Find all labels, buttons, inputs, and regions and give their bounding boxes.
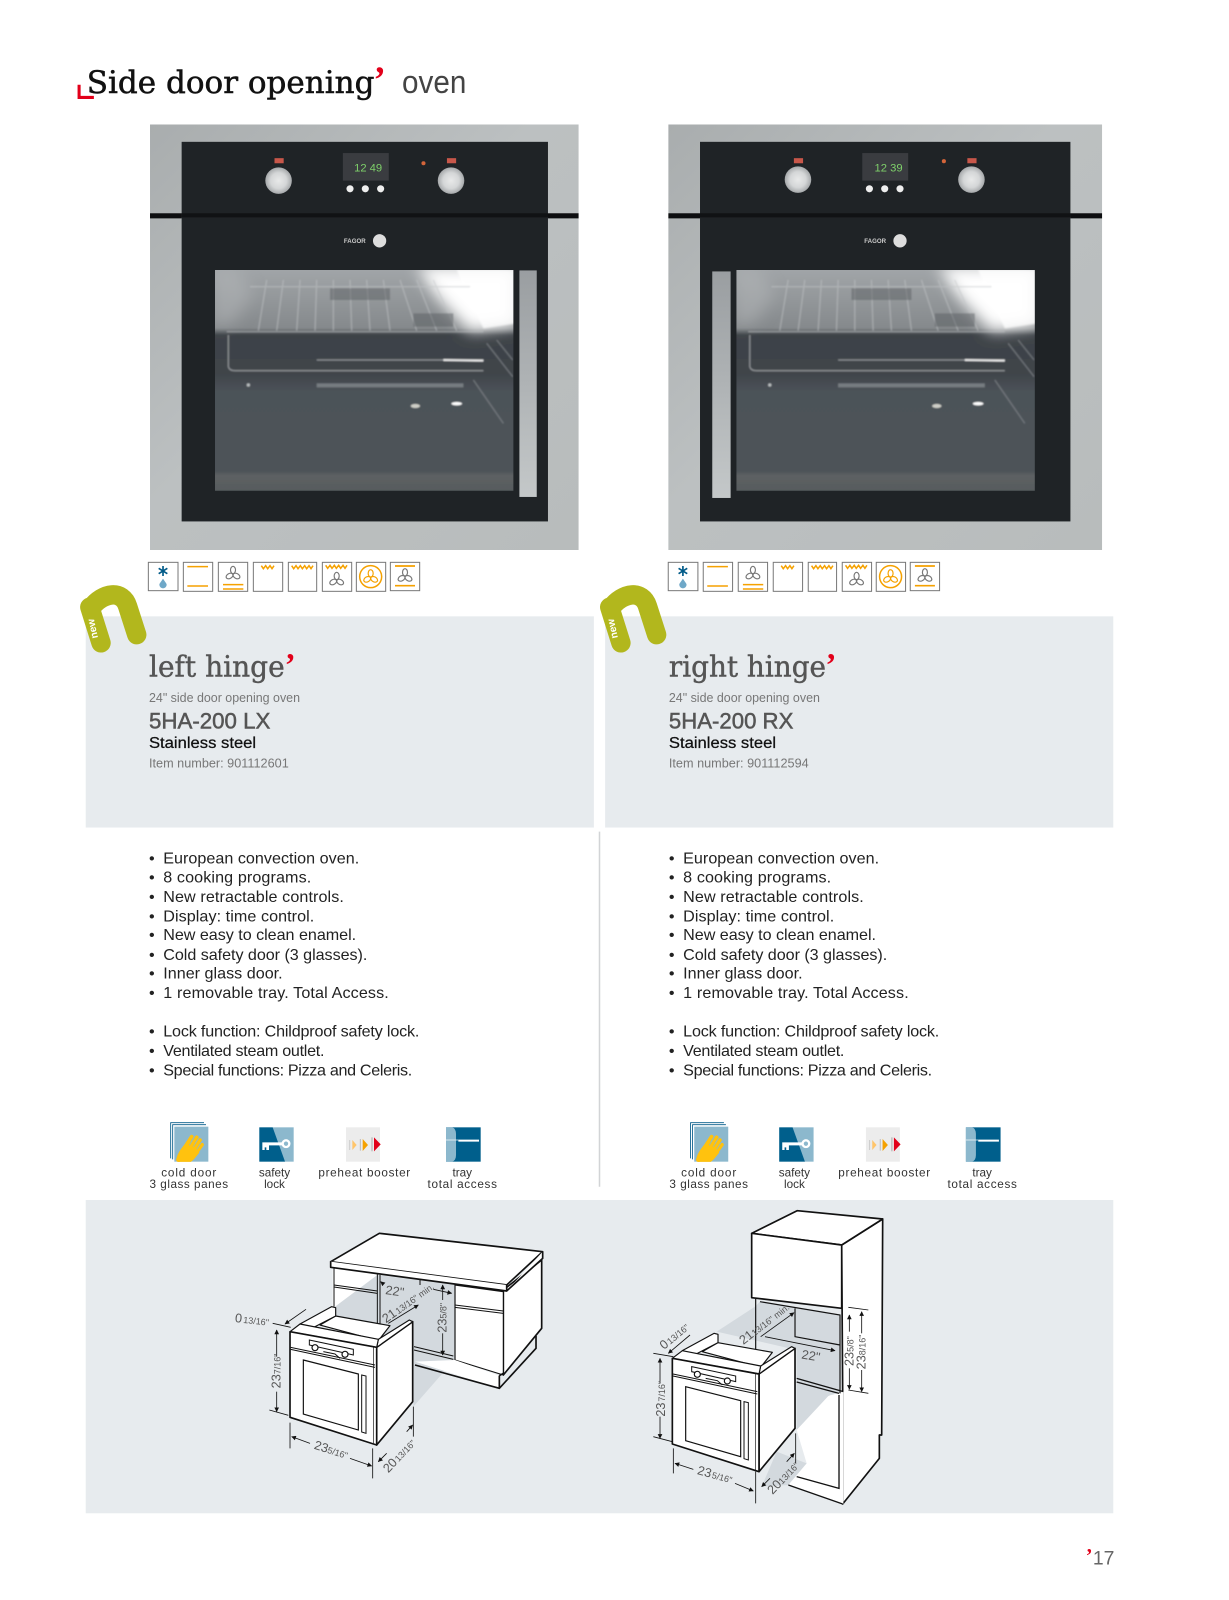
title: ’ <box>373 59 386 100</box>
feature list: left: Ventilated steam outlet. <box>163 1042 324 1060</box>
right function icons <box>668 562 940 591</box>
feature labels: right: lock <box>784 1178 805 1191</box>
feature labels: right: preheat booster <box>838 1167 930 1180</box>
feature list: right: Cold safety door (3 glasses). <box>683 946 887 964</box>
feature labels: left <box>150 1167 497 1191</box>
feature list: left: European convection oven. <box>163 849 359 867</box>
feature labels: right: total access <box>947 1178 1017 1191</box>
feature list: right: 1 removable tray. Total Access. <box>683 984 909 1002</box>
feature list: left: • <box>149 1062 155 1080</box>
feature labels: right: tray <box>972 1167 992 1180</box>
panel: right model <box>605 616 1113 828</box>
page number: ’ <box>1086 1545 1093 1567</box>
feature list: left: • <box>149 1023 155 1041</box>
feature list: right: Display: time control. <box>683 907 834 925</box>
feature labels: right: 3 glass panes <box>669 1178 748 1191</box>
text block: left model: left hinge <box>149 650 285 684</box>
diagram: under-counter installation: 013/16" <box>234 1311 270 1329</box>
feature list: right: 8 cooking programs. <box>683 869 831 887</box>
diagram: wall-cabinet installation: 235/8" <box>842 1336 856 1366</box>
feature list: left: • <box>149 946 155 964</box>
feature list: right: New retractable controls. <box>683 888 864 906</box>
feature list: right: • <box>669 907 675 925</box>
feature list: right: • <box>669 888 675 906</box>
feature list: left <box>149 849 419 1080</box>
feature list: left: • <box>149 907 155 925</box>
feature list: left: 8 cooking programs. <box>163 869 311 887</box>
diagram: under-counter installation: 237/16" <box>270 1354 284 1388</box>
diagram: wall-cabinet installation: 013/16" <box>657 1320 692 1352</box>
feature list: right: New easy to clean enamel. <box>683 926 876 944</box>
diagram: wall-cabinet installation <box>653 1211 883 1504</box>
feature list: left: • <box>149 849 155 867</box>
icon: red corner mark <box>78 85 94 99</box>
feature list: right: • <box>669 849 675 867</box>
badge: new left: new <box>86 618 101 639</box>
text block: left model: 24" side door opening oven <box>149 690 300 705</box>
feature list: right <box>669 849 939 1080</box>
feature list: right: Special functions: Pizza and Celeris. <box>683 1062 932 1080</box>
feature icons: left <box>171 1123 481 1162</box>
text block: left model: ’ <box>285 648 296 684</box>
feature labels: right: cold door <box>681 1167 736 1180</box>
feature list: right: • <box>669 926 675 944</box>
feature list: right: • <box>669 965 675 983</box>
diagram: wall-cabinet installation: 22" <box>800 1348 821 1365</box>
diagram: under-counter installation: 22" <box>385 1283 405 1300</box>
feature list: left: Inner glass door. <box>163 965 283 983</box>
text block: right model: right hinge <box>669 650 826 684</box>
feature list: left: • <box>149 1042 155 1060</box>
feature list: left: • <box>149 869 155 887</box>
title: oven <box>402 63 466 100</box>
panel: left model <box>86 616 594 828</box>
feature labels: left: preheat booster <box>318 1167 410 1180</box>
text block: left model: Item number: 901112601 <box>149 755 289 770</box>
text block: right model <box>669 648 836 770</box>
badge: new right <box>606 595 657 643</box>
feature list: right: Lock function: Childproof safety lock. <box>683 1023 939 1041</box>
text block: right model: 24" side door opening oven <box>669 690 820 705</box>
text block: left model: Stainless steel <box>149 735 256 752</box>
feature list: left: • <box>149 926 155 944</box>
feature list: right: Ventilated steam outlet. <box>683 1042 844 1060</box>
title: Side door opening <box>87 66 375 101</box>
feature list: left: New easy to clean enamel. <box>163 926 356 944</box>
diagram: under-counter installation: 2113/16" min. <box>380 1279 437 1326</box>
feature list: right: • <box>669 869 675 887</box>
diagram: wall-cabinet installation: 238/16" <box>855 1335 869 1369</box>
feature list: left: • <box>149 965 155 983</box>
left function icons <box>148 562 420 591</box>
title <box>78 59 466 101</box>
feature labels: left: tray <box>452 1167 472 1180</box>
feature list: left: Special functions: Pizza and Celeris. <box>163 1062 412 1080</box>
feature list: left: Display: time control. <box>163 907 314 925</box>
text block: right model: Item number: 901112594 <box>669 755 809 770</box>
diagram: wall-cabinet installation: 2013/16" <box>765 1458 802 1497</box>
diagram: wall-cabinet installation: 237/16" <box>654 1381 668 1417</box>
feature list: right: • <box>669 946 675 964</box>
feature list: right: • <box>669 1023 675 1041</box>
left oven photo: 12 49 <box>354 162 382 174</box>
right oven photo: 12 39 <box>874 162 903 174</box>
text block: left model <box>149 648 300 770</box>
feature list: left: Lock function: Childproof safety lock. <box>163 1023 419 1041</box>
diagram: under-counter installation: 235/8" <box>436 1303 450 1333</box>
text block: right model: Stainless steel <box>669 735 776 752</box>
badge: new right: new <box>606 618 621 639</box>
feature icons: right <box>691 1123 1001 1162</box>
feature labels: left: safety <box>259 1167 290 1180</box>
feature list: left: Cold safety door (3 glasses). <box>163 946 367 964</box>
feature list: left: New retractable controls. <box>163 888 344 906</box>
feature labels: left: 3 glass panes <box>150 1178 228 1191</box>
feature labels: right: safety <box>779 1167 810 1180</box>
feature list: right: • <box>669 984 675 1002</box>
feature list: right: • <box>669 1062 675 1080</box>
feature labels: right <box>669 1167 1017 1191</box>
diagram: wall-cabinet installation: 2113/16" min. <box>737 1300 792 1347</box>
diagram: under-counter installation <box>234 1233 543 1478</box>
feature list: left: 1 removable tray. Total Access. <box>163 984 389 1002</box>
text block: left model: 5HA-200 LX <box>149 709 270 734</box>
feature list: left: • <box>149 984 155 1002</box>
diagram: under-counter installation: 235/16" <box>312 1438 350 1462</box>
text block: right model: ’ <box>826 648 836 684</box>
feature labels: left: lock <box>264 1178 285 1191</box>
feature labels: left: total access <box>428 1178 497 1191</box>
feature list: right: • <box>669 1042 675 1060</box>
page number <box>1086 1545 1114 1569</box>
badge: new left <box>86 595 137 643</box>
right oven photo: FAGOR <box>864 238 887 245</box>
right oven photo <box>668 124 1102 550</box>
feature labels: left: cold door <box>161 1167 216 1180</box>
page number: 17 <box>1093 1547 1114 1569</box>
left oven photo: FAGOR <box>344 238 366 245</box>
feature list: right: European convection oven. <box>683 849 879 867</box>
feature list: left: • <box>149 888 155 906</box>
diagram: under-counter installation: 2013/16" <box>380 1436 418 1475</box>
diagram: wall-cabinet installation: 235/16" <box>696 1463 734 1486</box>
left oven photo <box>150 124 579 550</box>
text block: right model: 5HA-200 RX <box>669 709 793 734</box>
feature list: right: Inner glass door. <box>683 965 803 983</box>
panel: installation diagrams <box>86 1200 1113 1513</box>
